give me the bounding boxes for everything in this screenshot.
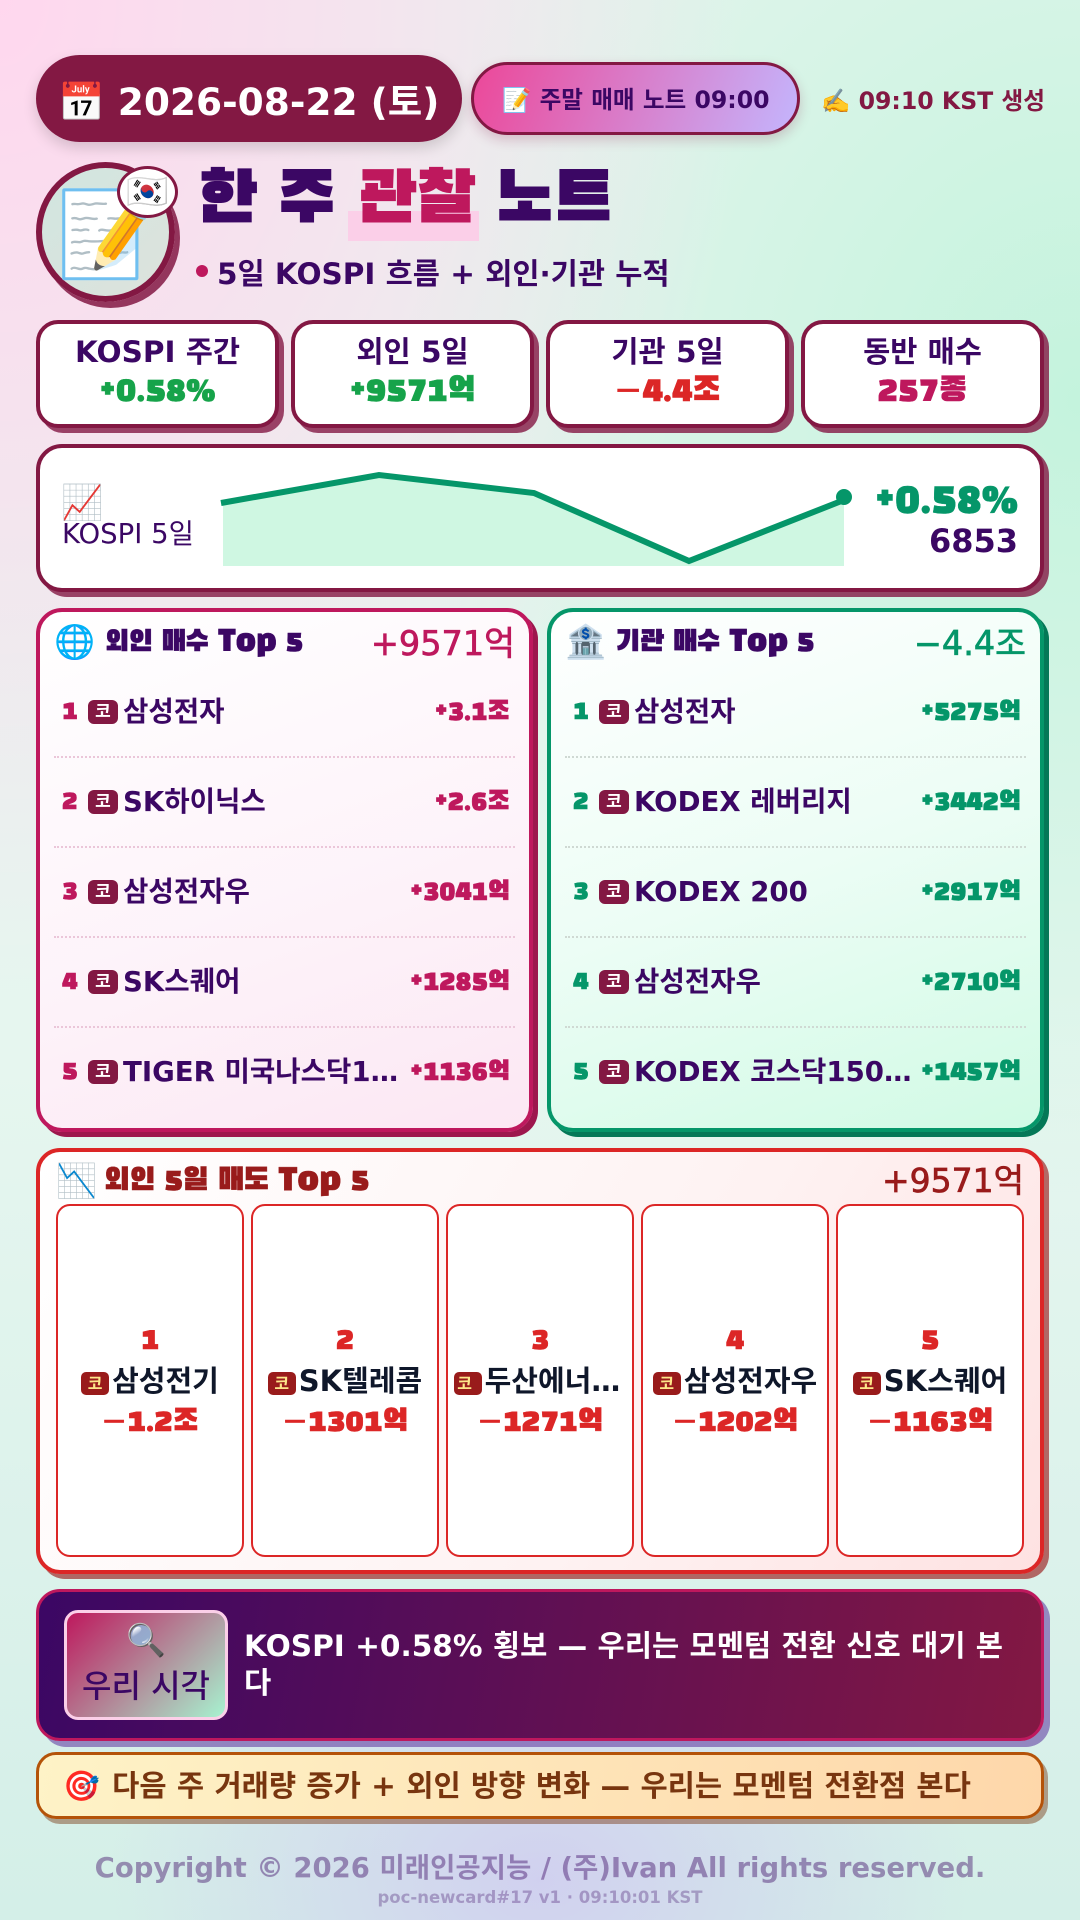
row 5: TIGER 미국나스닥1… [123,1055,398,1088]
panel: next week: 🎯 다음 주 거래량 증가 + 외인 방향 변화 — 우리는 모멘텀 전환점 본다 [63,1769,971,1803]
panel: KOSPI chart [36,444,1044,592]
kpi: institution [546,320,789,428]
icon: flag badge: 🇰🇷 [126,172,169,212]
chart change: +0.58% [875,480,1018,522]
sell card 3: 두산에너… [485,1364,620,1398]
icon: chart down: 📉 [56,1161,97,1200]
sell card 3 [446,1204,634,1557]
session pill: 📝 주말 매매 노트 09:00 [502,86,770,114]
kpi: foreign [291,320,534,428]
row 1: +3.1조 [435,699,510,726]
line chart [220,472,852,566]
sell card 5: −1163억 [867,1407,993,1438]
row 3: 3 [62,879,78,905]
sell card 2: SK텔레콤 [299,1364,422,1398]
header title: 기관 매수 Top 5 [616,629,814,658]
icon: chart up: 📈 [61,483,103,523]
row 2: 코 [95,792,111,812]
chart value: 6853 [929,522,1018,560]
kpi: foreign: +9571억 [350,375,475,409]
row 5 [573,1055,1021,1088]
sell card 2: −1301억 [282,1407,408,1438]
row 2 [573,785,1021,818]
row 2 [62,785,510,818]
panel: our view [36,1589,1044,1741]
panel: institution buy [547,608,1044,1132]
sell total: +9571억 [882,1161,1024,1200]
panel: next week [36,1752,1044,1819]
sell card 3: 코 [457,1374,472,1393]
row 3: KODEX 200 [634,875,808,908]
row 3: 코 [606,882,622,902]
sell card 1 [56,1204,244,1557]
row 5: 코 [95,1062,111,1082]
sell card 5 [836,1204,1024,1557]
date pill [36,55,462,142]
kpi: KOSPI: KOSPI 주간 [75,335,240,369]
title: 한 주 관찰 노트 [198,167,613,237]
row 4 [573,965,1021,998]
row 3: +3041억 [410,879,510,906]
sell card 5: SK스퀘어 [884,1364,1007,1398]
row 5 [62,1055,510,1088]
row 2: +3442억 [921,789,1021,816]
title highlight [348,211,479,241]
row 2: 코 [606,792,622,812]
row 4: +1285억 [410,969,510,996]
row 3: +2917억 [921,879,1021,906]
sell card 4: 코 [659,1374,674,1393]
row 1: 삼성전자 [634,695,736,728]
row 3: 3 [573,879,589,905]
sell card 4: 4 [726,1326,744,1356]
sell card 2: 2 [336,1326,354,1356]
row 3: 삼성전자우 [123,875,250,908]
date pill: 📅 2026-08-22 (토) [58,80,439,124]
row 2: KODEX 레버리지 [634,785,852,818]
row 5: 코 [606,1062,622,1082]
row 1: 코 [95,702,111,722]
row 3: 코 [95,882,111,902]
subtitle: 5일 KOSPI 흐름 + 외인·기관 누적 [217,257,670,291]
row 1 [62,695,510,728]
header total: +9571억 [371,624,515,663]
row 2: +2.6조 [435,789,510,816]
header title: 외인 매수 Top 5 [105,629,303,658]
row 1: 1 [573,699,589,725]
row 2: SK하이닉스 [123,785,266,818]
kpi: KOSPI: +0.58% [100,375,215,409]
row 4: 코 [606,972,622,992]
row 2: 2 [573,789,589,815]
build stamp: poc-newcard#17 v1 · 09:10:01 KST [377,1888,703,1907]
row 1 [573,695,1021,728]
sell card 3: −1271억 [477,1407,603,1438]
kpi: joint buy [801,320,1044,428]
icon: note in circle: 📝 [56,185,161,283]
sell card 1: 1 [141,1326,159,1356]
view badge [64,1610,228,1720]
sell card 1: −1.2조 [101,1407,199,1438]
view text: KOSPI +0.58% 횡보 — 우리는 모멘텀 전환 신호 대기 본다 [244,1629,1003,1700]
sell card 1: 삼성전기 [112,1364,219,1398]
view badge: 🔍 [126,1621,166,1659]
row 4: +2710억 [921,969,1021,996]
row 4: SK스퀘어 [123,965,240,998]
copyright: Copyright © 2026 미래인공지능 / (주)Ivan All rights reserved. [95,1852,985,1884]
sell card 5: 코 [859,1374,874,1393]
row 1: 1 [62,699,78,725]
row 5: 5 [62,1059,78,1085]
sell card 1: 코 [88,1374,102,1393]
sell card 4 [641,1204,829,1557]
kpi: KOSPI [36,320,279,428]
row 4: 4 [573,969,589,995]
chart label: KOSPI 5일 [62,518,194,550]
row 1: 삼성전자 [123,695,225,728]
panel: foreign sell [36,1148,1044,1574]
row 3 [62,875,510,908]
sell card 4: −1202억 [672,1407,798,1438]
session pill [471,62,800,135]
row 4: 4 [62,969,78,995]
row 1: 코 [606,702,622,722]
view badge: 우리 시각 [82,1667,210,1705]
kpi: institution: −4.4조 [614,375,721,409]
sell card 2: 코 [274,1374,289,1393]
sell card 3: 3 [531,1326,549,1356]
row 4: 코 [95,972,111,992]
row 3 [573,875,1021,908]
row 1: +5275억 [921,699,1021,726]
row 4 [62,965,510,998]
header total: −4.4조 [914,624,1026,663]
header icon: 🌐 [54,622,95,661]
sell card 2 [251,1204,439,1557]
sell card 5: 5 [921,1326,939,1356]
row 5: +1457억 [921,1059,1021,1086]
icon: note in circle [36,162,175,302]
panel: foreign buy [36,608,533,1132]
row 2: 2 [62,789,78,815]
kpi: joint buy: 257종 [878,375,967,409]
generated time: ✍️ 09:10 KST 생성 [821,87,1045,115]
kpi: foreign: 외인 5일 [356,335,469,369]
row 5: KODEX 코스닥150… [634,1055,912,1088]
row 5: 5 [573,1059,589,1085]
header icon: 🏦 [565,622,606,661]
kpi: joint buy: 동반 매수 [863,335,982,369]
sell card 4: 삼성전자우 [684,1364,817,1398]
kpi: institution: 기관 5일 [611,335,724,369]
row 4: 삼성전자우 [634,965,761,998]
row 5: +1136억 [410,1059,510,1086]
sell title: 외인 5일 매도 Top 5 [104,1166,369,1197]
icon: flag badge [117,166,178,218]
